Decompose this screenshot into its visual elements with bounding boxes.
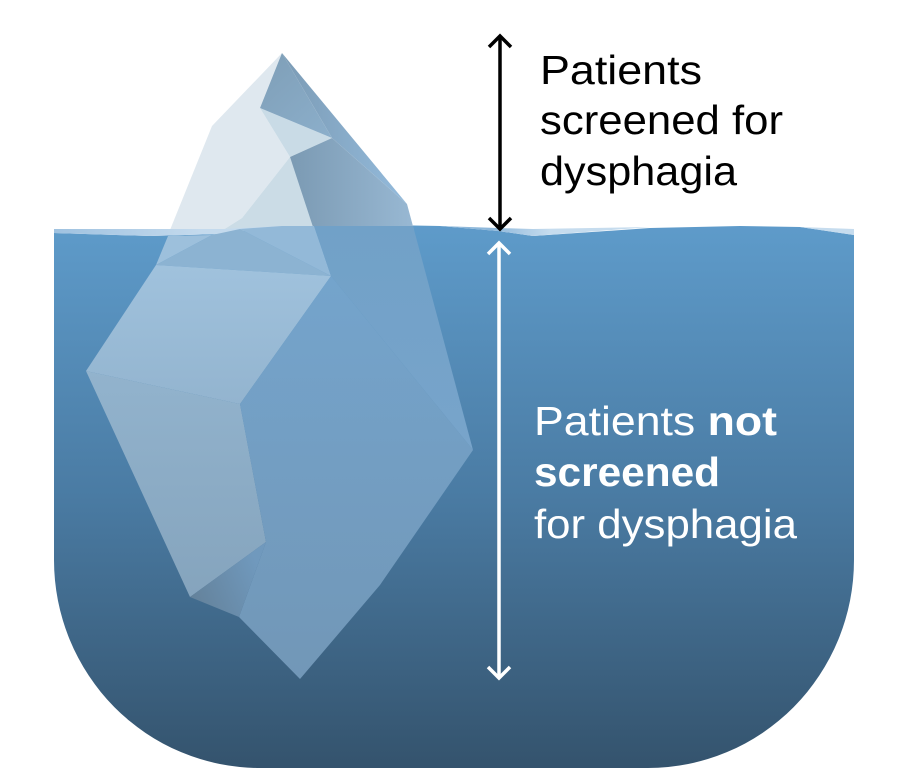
right upper facet: [314, 226, 473, 450]
label: screened: screened for: [540, 97, 783, 143]
dark top facet: [260, 53, 332, 138]
label: screened: [540, 47, 783, 194]
right dark facet: [290, 138, 414, 230]
label: screened: Patients: [540, 47, 702, 93]
shadow facet: [190, 542, 266, 617]
iceberg below water: [86, 226, 473, 679]
iceberg above water: [170, 53, 414, 230]
left strip facet: [156, 235, 212, 265]
central facet: [239, 276, 473, 679]
label: screened: dysphagia: [540, 148, 737, 194]
middle strip facet: [156, 229, 331, 276]
far right band: [800, 227, 854, 235]
right strip facet: [282, 53, 407, 204]
lower left facet: [86, 371, 266, 597]
upper left facet: [86, 265, 331, 404]
label: not screened: screened: [534, 449, 720, 495]
left band: [54, 226, 282, 236]
arrow: below water: [488, 243, 510, 678]
label: not screened: [534, 398, 797, 547]
upper light facet: [260, 108, 332, 157]
label: not screened: Patients not: [534, 398, 777, 444]
label: not screened: for dysphagia: [534, 501, 797, 547]
light face: [170, 53, 290, 230]
lower light facet: [223, 157, 314, 230]
right strip facet: [240, 226, 331, 276]
water surface light band: [54, 226, 854, 236]
water body: [54, 224, 854, 768]
arrow: above water: [489, 36, 511, 229]
right band: [440, 226, 650, 236]
